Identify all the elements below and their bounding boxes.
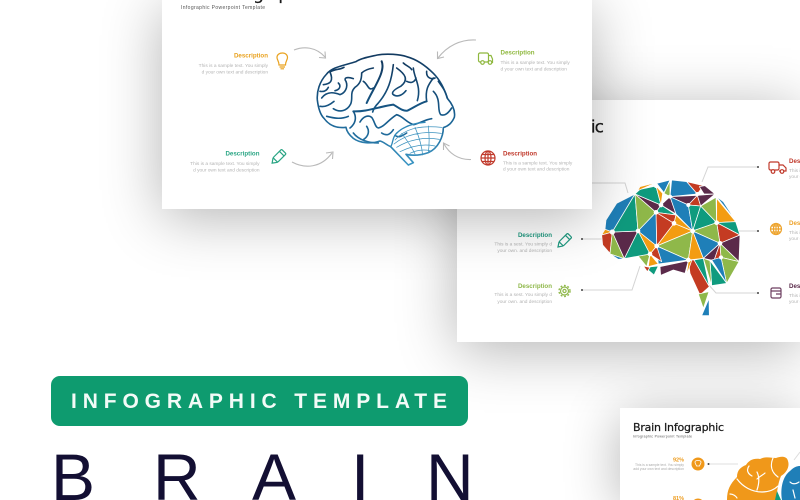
banner text: INFOGRAPHIC TEMPLATE: [71, 390, 447, 413]
slide subtitle: Infographic Powerpoint Template: [633, 434, 692, 438]
callout: green description: d your own text and description: [500, 66, 567, 72]
callout: green description: [500, 50, 570, 72]
callout: red description: [789, 158, 800, 180]
callout: red description: This is a sample text. You simply: [503, 160, 573, 166]
callout: green description: Description: [518, 283, 552, 290]
chart: line brain: [317, 54, 455, 165]
panel: polygon brain slide: [457, 100, 800, 342]
callout: teal description: d your own text and description: [193, 168, 260, 174]
callout: teal description: Description: [518, 232, 552, 239]
callout: green description: your own. and description: [497, 299, 552, 305]
callout: teal description: [190, 150, 260, 174]
callout: teal description: This is a sample text. You simply: [190, 161, 260, 167]
callout: orange description: Description: [234, 52, 268, 60]
callout: red description: [503, 150, 573, 172]
callout: orange description: d your own text and description: [202, 70, 268, 76]
panel: line brain slide: [162, 0, 592, 209]
icon: truck: [478, 53, 492, 64]
chart: colored brain: [727, 452, 800, 500]
callout: 81 percent: [673, 496, 704, 500]
icon: globe: [481, 151, 495, 165]
icon: light bulb: [277, 53, 288, 69]
connector line: [708, 463, 738, 465]
callout: green description: This is a sample text. You simply: [500, 60, 570, 66]
callout: teal description: Description: [225, 150, 260, 158]
slide title: Brain Infographic: [633, 421, 724, 434]
arrow: top left: [294, 48, 326, 58]
chart: polygon brain: [602, 180, 740, 316]
callout: maroon description: [789, 283, 800, 305]
connector lines: [582, 167, 758, 293]
callout: orange description: [199, 52, 269, 76]
panel: colored brain slide: [620, 408, 800, 500]
connector dots: [581, 166, 759, 294]
callout: red description: d your own text and description: [503, 166, 570, 172]
icon: gear: [559, 286, 570, 296]
callout: orange description: [789, 220, 800, 242]
callout: orange description: This is a sample text. You simply: [199, 63, 269, 69]
callout: green description: [494, 283, 552, 305]
callout: green description: Description: [500, 50, 535, 56]
icon: wallet: [771, 288, 781, 298]
icon: orange bulb badge: [692, 458, 704, 470]
callout: teal description: your own. and description: [497, 248, 552, 254]
slide subtitle: Infographic Powerpoint Template: [181, 5, 265, 11]
icon: pencil: [270, 149, 286, 165]
callout: 92 percent: 92%: [673, 458, 684, 464]
banner: infographic template: [51, 376, 468, 426]
arrow: top right: [438, 40, 476, 58]
callout: 92 percent: This is a sample text. You simply: [635, 463, 684, 467]
arrow: bottom left: [292, 152, 333, 166]
slide title: Brain Infographic: [474, 118, 604, 138]
callout: red description: Description: [503, 150, 537, 158]
callout: green description: This is a sest. You simply d: [494, 292, 552, 298]
icon: truck: [769, 162, 786, 173]
callout: 92 percent: add your own text and description: [633, 467, 684, 471]
title: BRAIN: [51, 440, 474, 500]
callout: 92 percent: [633, 458, 684, 471]
callout: teal description: This is a sest. You simply d: [494, 242, 552, 248]
icon: globe: [770, 224, 782, 234]
icon: pencil: [556, 233, 572, 249]
callout: teal description: [494, 232, 552, 254]
arrow: bottom right: [444, 143, 471, 160]
